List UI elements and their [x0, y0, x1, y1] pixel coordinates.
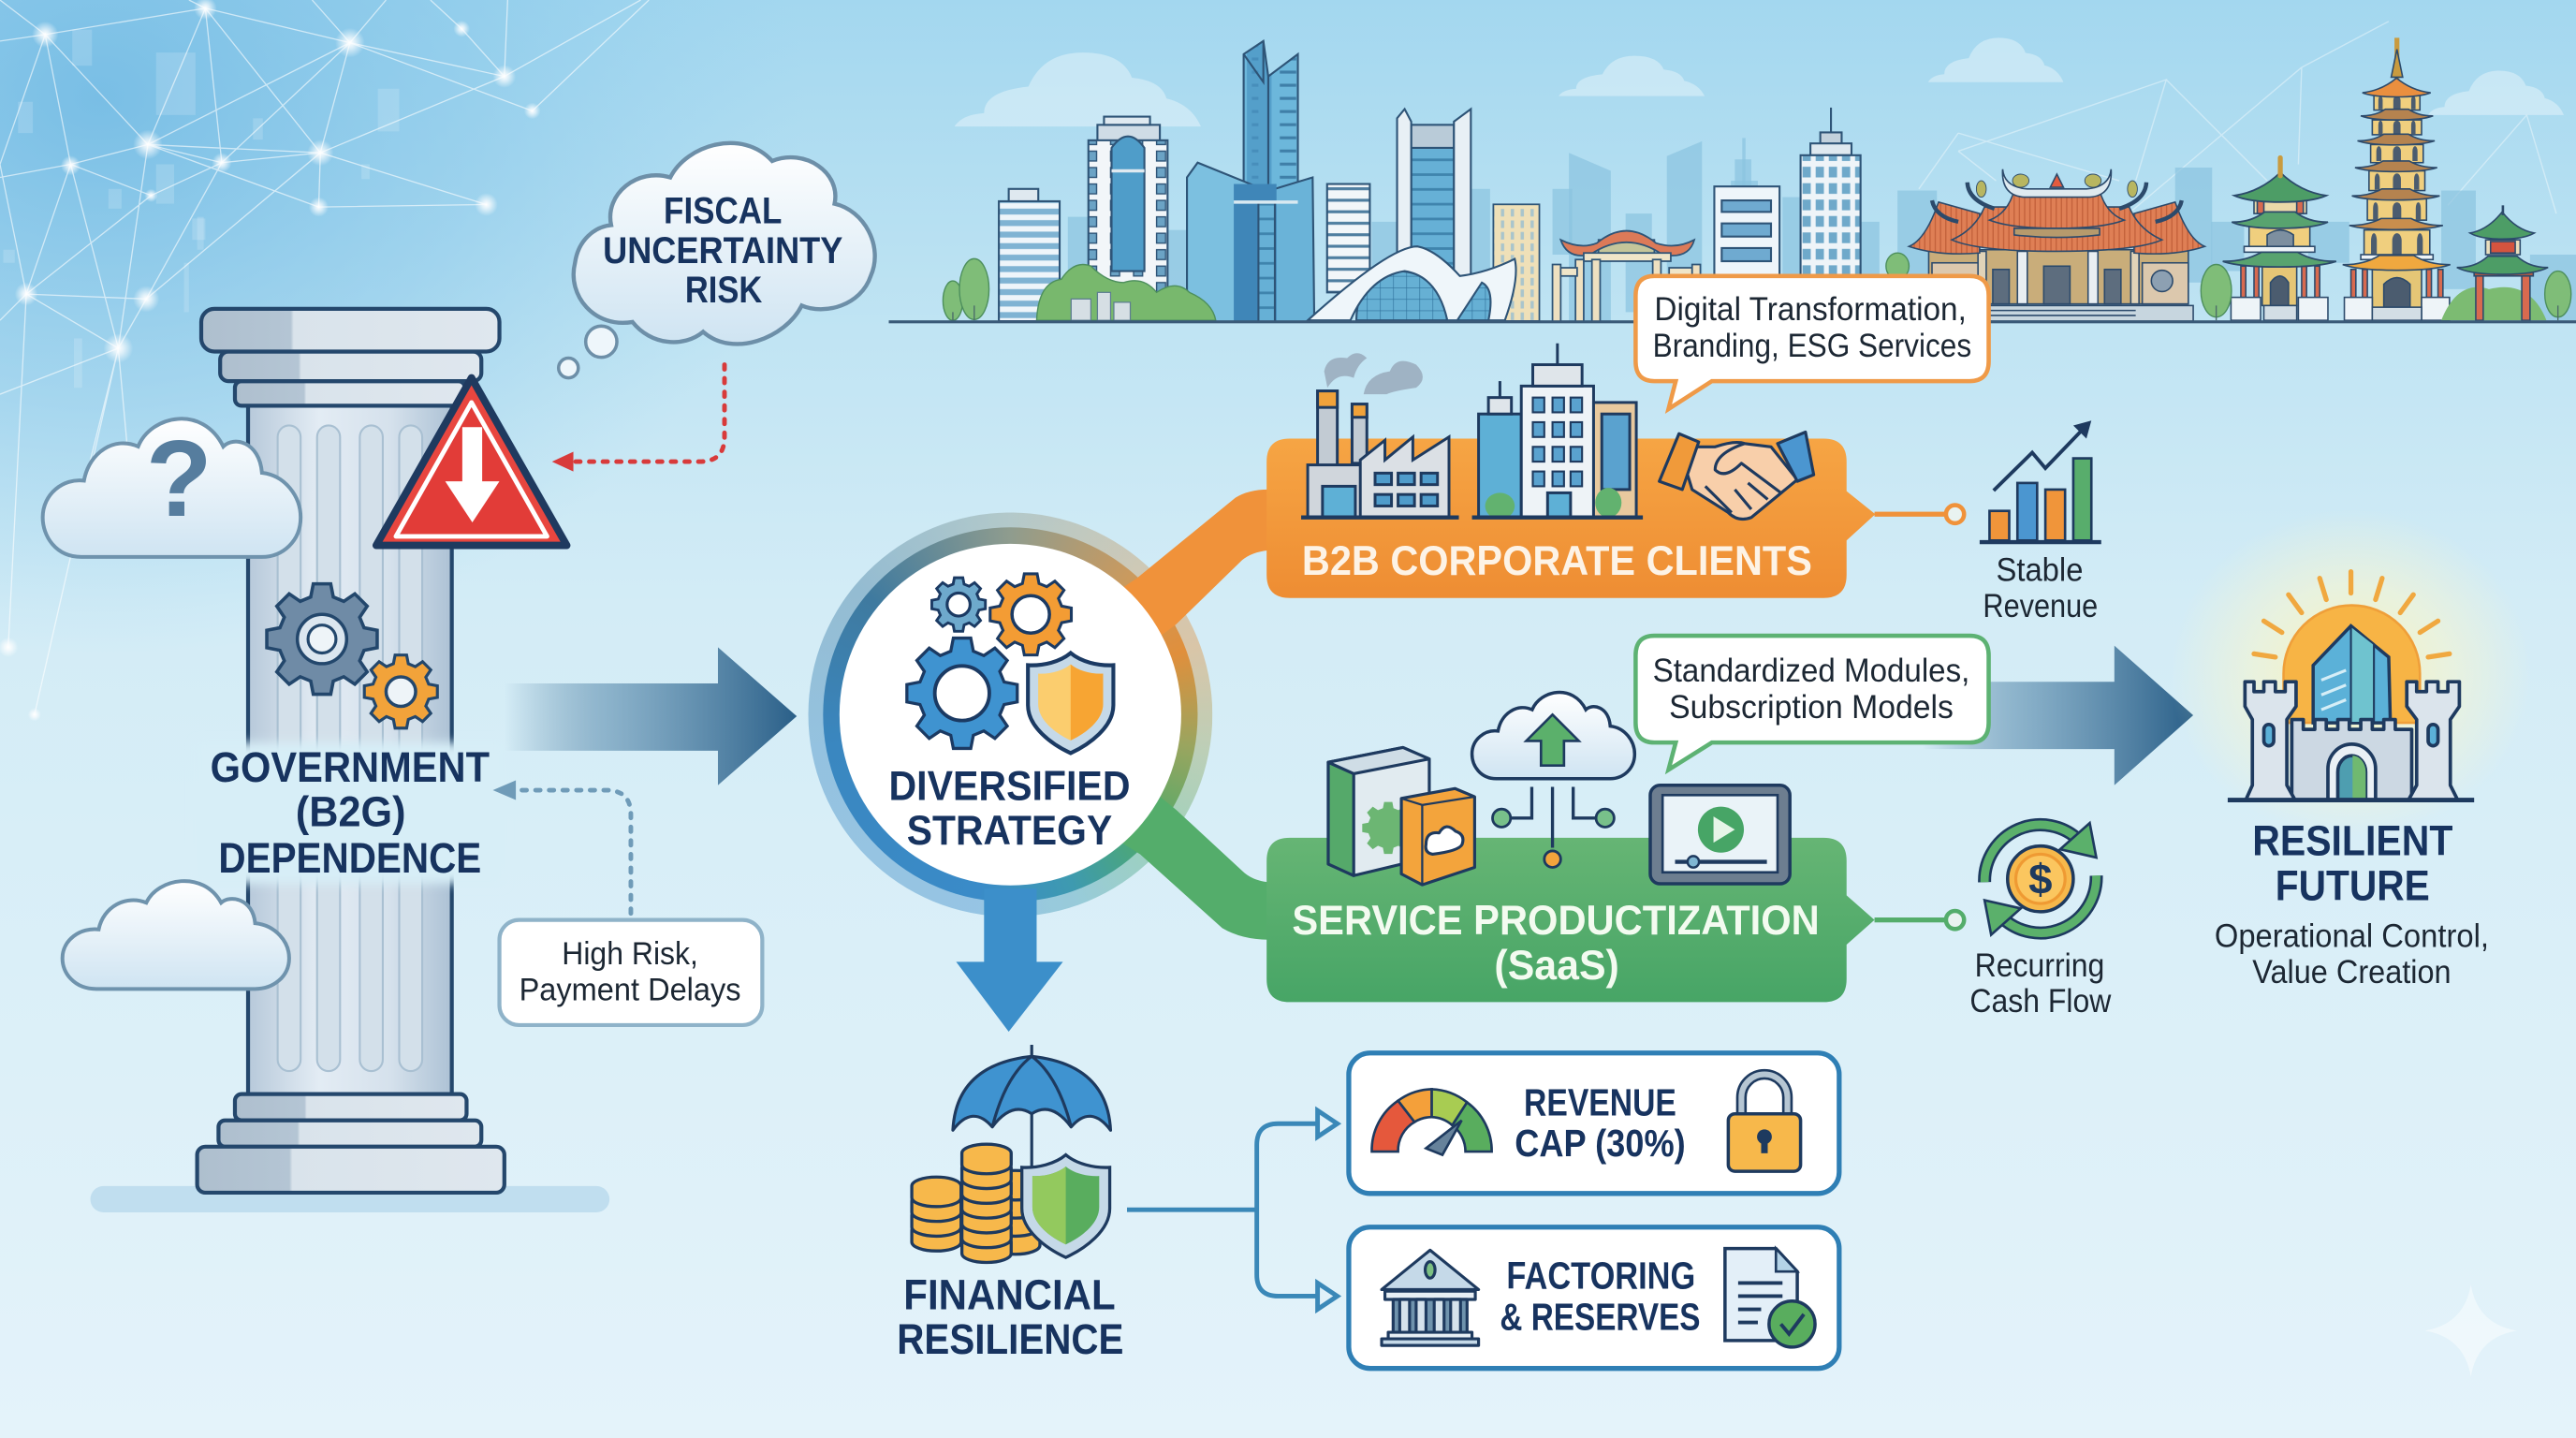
icon: factory [1301, 353, 1459, 518]
callout: high risk [500, 920, 762, 1025]
pillar shaft [198, 309, 505, 1193]
network pattern top left [0, 0, 649, 721]
callout: high risk: Payment Delays [520, 973, 741, 1008]
ground line [889, 320, 2576, 323]
hub title: DIVERSIFIED [889, 763, 1131, 810]
small pagoda [2223, 157, 2336, 320]
pavilion [2441, 205, 2548, 320]
icon: gray gear [267, 584, 377, 695]
callout: standardized modules: Subscription Models [1669, 689, 1954, 726]
icon: warning triangle [376, 378, 567, 546]
sky clouds [955, 37, 2564, 126]
building: tan [1493, 204, 1540, 321]
icon: gauge [1371, 1089, 1492, 1155]
icon: recurring cash flow: $ [2028, 856, 2053, 903]
chart: stable revenue: Revenue [1983, 588, 2098, 624]
panel: service productization: SERVICE PRODUCTIZATION [1292, 897, 1820, 944]
arrow: red dotted [552, 365, 724, 472]
icon: bank [1382, 1250, 1479, 1345]
label: government dependence: GOVERNMENT [211, 743, 490, 791]
coins [912, 1144, 1040, 1263]
label: resilient future [2215, 816, 2489, 990]
label: resilient future: RESILIENT [2252, 816, 2452, 864]
icon: cloud upload [1472, 693, 1634, 867]
icon: recurring cash flow [1969, 823, 2112, 1020]
panel: B2B corporate clients [1266, 344, 1964, 598]
label: government dependence: (B2G) [296, 788, 406, 836]
panel: revenue cap [1349, 1053, 1839, 1194]
icon: office [1472, 344, 1643, 519]
hub: diversified strategy [809, 490, 1268, 940]
background buildings [1068, 138, 2576, 322]
label: resilient future: Operational Control, [2215, 917, 2489, 954]
cloud: fiscal uncertainty risk: UNCERTAINTY [603, 230, 842, 271]
hub gears and shield [907, 574, 1113, 753]
pillar label fade [198, 742, 503, 884]
icon: orange gear [364, 655, 437, 728]
icon: tablet video [1650, 785, 1790, 884]
label: government dependence: DEPENDENCE [218, 834, 481, 882]
callout: digital transformation: Branding, ESG Services [1653, 328, 1971, 364]
cloud: question mark: ? [146, 418, 212, 539]
cloud: fiscal uncertainty risk: RISK [685, 270, 763, 311]
arrow: blue down [956, 888, 1063, 1032]
icon: resilient castle [2170, 509, 2532, 838]
building: glass tower [1187, 163, 1314, 322]
big arrow: to resilient future [1922, 646, 2193, 785]
callout: high risk: High Risk, [562, 936, 698, 972]
callout: digital transformation [1635, 276, 1989, 409]
hub white disc [840, 544, 1181, 886]
label: government dependence [211, 743, 490, 882]
tall pagoda [2343, 37, 2451, 320]
panel: service productization: (SaaS) [1494, 942, 1619, 989]
label: resilient future: FUTURE [2276, 862, 2430, 910]
label: financial resilience [897, 1271, 1123, 1363]
building: left stripes [999, 189, 1060, 321]
label: financial resilience: RESILIENCE [897, 1315, 1123, 1363]
building: mid stripes [1714, 186, 1779, 285]
connector: resilience branches [1127, 1110, 1338, 1310]
building: tall blue [1398, 110, 1471, 276]
gate [1553, 231, 1701, 322]
sparkle watermark [2425, 1284, 2517, 1376]
temple [1909, 169, 2204, 321]
building: twin tower [1089, 117, 1167, 321]
trees and bushes [943, 253, 2571, 320]
chart: stable revenue: Stable [1996, 551, 2083, 588]
hub title [889, 763, 1131, 854]
panel: revenue cap: CAP (30%) [1515, 1122, 1686, 1165]
icon: recurring cash flow: Cash Flow [1969, 983, 2112, 1020]
label: resilient future: Value Creation [2252, 954, 2452, 990]
hub ring [809, 512, 1212, 917]
panel: factoring and reserves: & RESERVES [1500, 1296, 1701, 1339]
panel: factoring and reserves: FACTORING [1506, 1255, 1695, 1298]
icon: handshake [1660, 432, 1814, 519]
skyline [889, 22, 2576, 323]
building: arch pavilion [1308, 246, 1516, 320]
icon: document check [1725, 1249, 1815, 1347]
callout: standardized modules [1635, 636, 1989, 770]
connector: green branch [1114, 788, 1268, 940]
building: spire tower [1244, 41, 1298, 205]
callout: standardized modules: Standardized Modules, [1653, 653, 1969, 689]
building: narrow stripes [1327, 184, 1369, 292]
safety shield [1022, 1155, 1110, 1257]
big arrow: to strategy [505, 647, 797, 785]
icon: recurring cash flow: Recurring [1975, 947, 2104, 984]
pillar: government [91, 309, 609, 1212]
panel: revenue cap: REVENUE [1524, 1080, 1676, 1123]
umbrella [953, 1045, 1110, 1167]
connector: orange branch [1117, 490, 1268, 644]
callout: digital transformation: Digital Transformation, [1654, 291, 1967, 328]
faint network lines [1919, 22, 2556, 246]
cloud: fiscal uncertainty risk [559, 143, 875, 378]
arrow: gray dotted [493, 780, 631, 914]
panel: B2B corporate clients: B2B CORPORATE CLIENTS [1302, 537, 1812, 584]
cloud: fiscal uncertainty risk: FISCAL [664, 191, 782, 232]
chart: stable revenue [1980, 420, 2101, 624]
cloud: lower [63, 881, 289, 989]
building: antenna tower [1801, 108, 1861, 278]
cloud: question mark [43, 418, 300, 557]
hub title: STRATEGY [907, 807, 1112, 854]
icon: software box [1328, 747, 1474, 885]
icon: umbrella coins shield [912, 1045, 1110, 1263]
icon: lock [1728, 1075, 1801, 1171]
label: financial resilience: FINANCIAL [903, 1271, 1116, 1319]
panel: factoring and reserves [1349, 1227, 1839, 1369]
panel: service productization [1266, 693, 1964, 1002]
